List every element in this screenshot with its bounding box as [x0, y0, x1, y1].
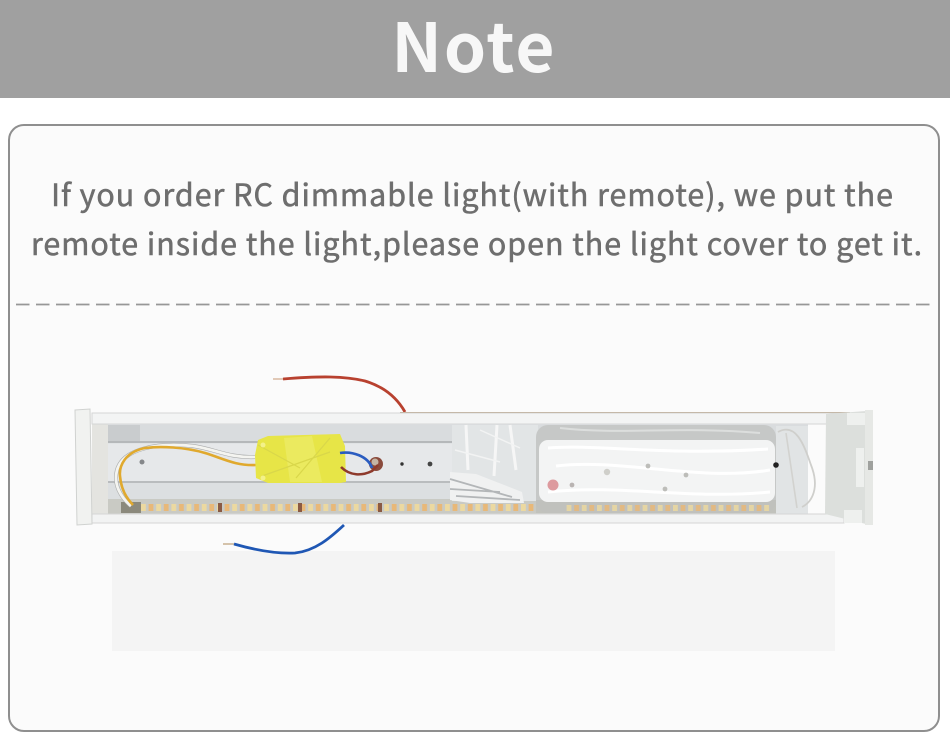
right end cap [825, 410, 873, 525]
low-voltage wires [116, 445, 256, 506]
left end cap [75, 409, 92, 525]
remote red button [548, 480, 558, 490]
LED strip top [146, 420, 836, 425]
power cord and right bracket [773, 426, 815, 514]
strip end shadow [121, 502, 141, 513]
text block: line one: If you order RC dimmable light(with remote), we put the [51, 171, 894, 215]
top rail [92, 412, 850, 424]
panel: note card [8, 124, 940, 732]
blue wire [223, 525, 344, 553]
top-left shadow patch [108, 425, 140, 441]
resistors on strip [218, 503, 222, 512]
back plate [92, 422, 808, 516]
header banner [0, 0, 950, 98]
LED strip bottom [141, 503, 536, 512]
driver output wires [340, 453, 378, 474]
text block: line two: remote inside the light,please open the light cover to get it. [31, 220, 923, 264]
bagged accessories [450, 425, 538, 503]
remote control in plastic bag [536, 425, 776, 513]
dashed divider [16, 304, 930, 306]
fixture body [92, 420, 836, 516]
bottom rail [92, 514, 844, 523]
red wire [273, 377, 405, 412]
driver wrapped in yellow tape [255, 434, 346, 483]
light cover panel [112, 551, 835, 651]
holes [140, 460, 144, 464]
